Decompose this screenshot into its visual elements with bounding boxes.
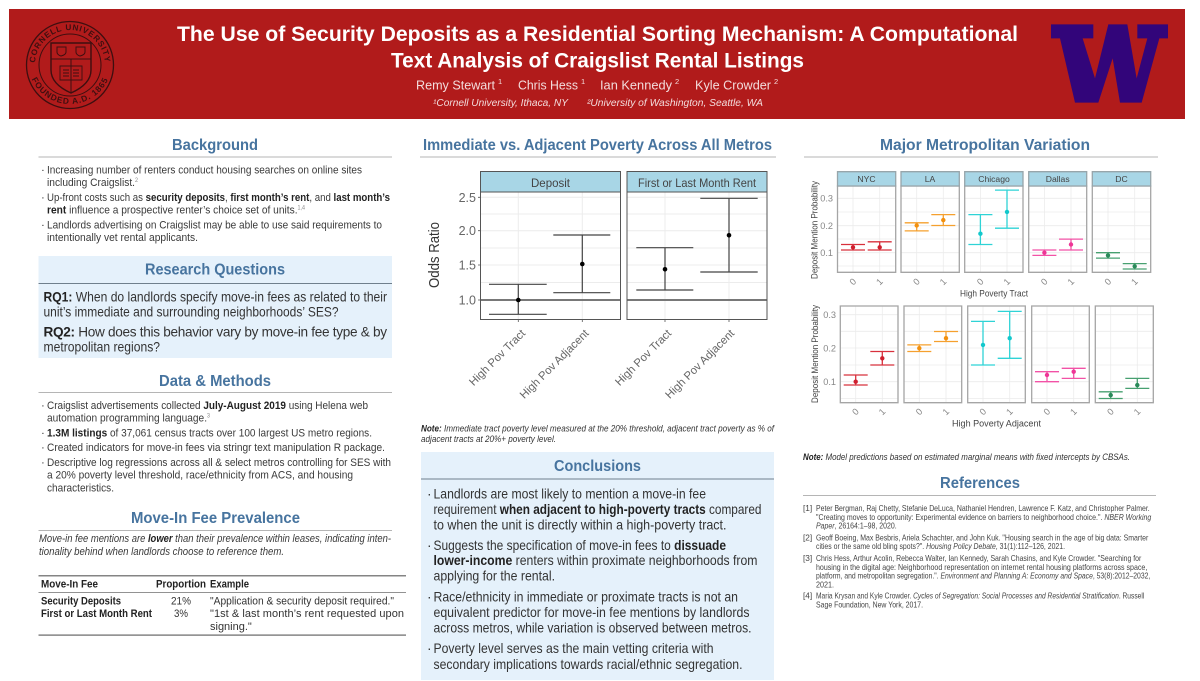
heading: background: Background <box>172 137 258 154</box>
table: move-in fee examples: Proportion <box>156 578 206 590</box>
metro panel frames and strips: Chicago <box>978 174 1010 184</box>
y axis title: Odds Ratio <box>427 222 443 288</box>
text block: data and methods bullets: automation programming language. <box>47 412 227 424</box>
heading: major metropolitan variation: Major Metropolitan Variation <box>880 137 1090 154</box>
axes labels: 1 <box>1004 407 1015 417</box>
series: NYC <box>841 242 892 250</box>
authors: Chris Hess <box>518 78 578 92</box>
header banner <box>9 9 1185 119</box>
text block: data and methods bullets: a 20% poverty level threshold, race/ethnicity from ACS, and housing <box>47 470 353 482</box>
table: move-in fee examples <box>38 575 406 636</box>
axes labels: High Poverty Adjacent <box>952 418 1042 428</box>
text block: conclusions bullets: Poverty level serves as the main vetting criteria with <box>434 640 714 656</box>
icon: University of Washington W logo <box>1051 24 1168 103</box>
axes labels <box>810 304 1143 428</box>
text block: prevalence note <box>39 533 391 558</box>
text block: research questions: unit’s immediate and surrounding neighborhoods’ SES? <box>44 304 339 320</box>
text block: reference list: 2021. <box>816 579 834 589</box>
authors: 1 <box>581 77 585 86</box>
series: NYC <box>844 352 894 385</box>
text block: conclusions bullets: · <box>427 640 432 656</box>
axes labels: 0.2 <box>823 344 836 354</box>
icon: Cornell University seal: CORNELL UNIVERSITY <box>30 24 110 62</box>
table: move-in fee examples: "Application & security deposit required." <box>210 596 394 608</box>
chart grid <box>838 186 1150 272</box>
text block: background bullets: 1,4 <box>298 206 306 212</box>
text block: conclusions bullets: equivalent predictor for move-in fee mentions by landlords <box>434 604 750 620</box>
text block: background bullets: Up-front costs such as security deposits, first month’s rent, and last month’s <box>47 192 390 204</box>
panel: first or last month rent strip and frame: First or Last Month Rent <box>638 176 757 190</box>
text block: conclusions bullets: lower-income renters within proximate neighborhoods from <box>434 552 758 568</box>
axes labels: 1 <box>941 407 951 417</box>
axes labels <box>810 180 1140 298</box>
icon: Cornell University seal <box>26 20 114 110</box>
text block: conclusions bullets: to when the unit is directly within a high-poverty tract. <box>434 516 726 532</box>
series: Dallas <box>1035 368 1086 382</box>
title <box>177 23 1018 72</box>
x axis labels <box>467 327 738 401</box>
axes labels: 0 <box>914 407 925 417</box>
text block: background bullets <box>41 164 390 244</box>
series: DC <box>1096 253 1147 269</box>
heading: conclusions: Conclusions <box>554 458 641 475</box>
table: move-in fee examples: Security Deposits <box>41 596 121 608</box>
text block: reference list: [3] <box>803 553 812 563</box>
y axis ticks and labels: 1.0 <box>459 294 476 308</box>
x axis labels: High Pov Tract <box>467 327 529 389</box>
authors: 2 <box>675 77 679 86</box>
authors <box>416 77 778 92</box>
table: move-in fee examples: First or Last Month Rent <box>41 608 152 620</box>
text block: reference list: cities or the same old bling spots?". Housing Policy Debate, 31(1):112–126, 2021. <box>816 541 1065 551</box>
table: move-in fee examples: 21% <box>171 596 191 608</box>
panel: major metropolitan variation <box>803 137 1158 462</box>
authors: Ian Kennedy <box>600 78 672 92</box>
axes labels: 0 <box>978 407 988 417</box>
text block: chart note: Note: Immediate tract poverty level measured at the 20% threshold, adjacent tract poverty as % of <box>421 422 775 434</box>
text block: conclusions bullets: secondary implications towards racial/ethnic segregation. <box>434 656 742 672</box>
affiliations <box>433 98 763 109</box>
axes labels: Deposit Mention Probability <box>810 304 820 403</box>
text block: background bullets: · <box>41 164 45 176</box>
text block: reference list: Sage Foundation, New York, 2017. <box>816 599 923 609</box>
axes labels: 0.1 <box>823 377 836 387</box>
axes labels: 0.3 <box>820 194 833 204</box>
series: LA <box>907 332 958 352</box>
reference line at 1.0 <box>480 299 767 301</box>
heading: research questions: Research Questions <box>145 262 285 278</box>
text block: conclusions bullets: Race/ethnicity in immediate or proximate tracts is not an <box>434 588 738 604</box>
text block: data and methods bullets: · <box>41 442 45 454</box>
text block: data and methods bullets: · <box>41 457 45 469</box>
chart: odds ratio by poverty measure <box>427 172 767 401</box>
axes labels: High Poverty Tract <box>960 288 1029 298</box>
x axis labels: High Pov Tract <box>613 327 675 389</box>
axes labels: 1 <box>1068 407 1079 417</box>
heading: data and methods: Data & Methods <box>159 373 271 390</box>
series: DC <box>1099 378 1149 398</box>
text block: data and methods bullets: 1.3M listings of 37,061 census tracts over 100 largest US metro regions. <box>47 428 372 440</box>
text block: reference list: [2] <box>803 532 812 542</box>
error bars and point estimates <box>489 198 758 314</box>
axes labels: 0 <box>848 277 858 287</box>
text block: background bullets: · <box>41 220 45 232</box>
panel: deposit strip and frame: Deposit <box>531 176 571 190</box>
axes labels: 0 <box>1105 407 1116 417</box>
heading: immediate vs adjacent poverty: Immediate vs. Adjacent Poverty Across All Metros <box>423 137 772 154</box>
y axis ticks and labels: 2.0 <box>459 224 476 238</box>
text block: chart note: adjacent tracts at 20%+ poverty level. <box>421 433 556 444</box>
table: move-in fee examples: Example <box>210 578 249 590</box>
text block: background bullets: · <box>41 192 45 204</box>
text block: conclusions bullets: · <box>427 588 432 604</box>
text block: data and methods bullets: · <box>41 400 45 412</box>
authors: Kyle Crowder <box>695 78 772 92</box>
axes labels: 1 <box>877 407 888 417</box>
authors: Remy Stewart <box>416 78 495 92</box>
text block: conclusions bullets: across metros, while variation is observed between metros. <box>434 620 752 636</box>
text block: reference list: Maria Krysan and Kyle Crowder. Cycles of Segregation: Social Processes and Residential Stratification. Russell <box>816 590 1144 600</box>
table: move-in fee examples: "1st & last month’s rent requested upon <box>210 608 404 620</box>
metro panel frames and strips: NYC <box>857 174 876 184</box>
text block: reference list: [1] <box>803 503 812 513</box>
y axis ticks and labels: 1.5 <box>459 258 476 272</box>
axes labels: 0 <box>1039 277 1050 287</box>
text block: research questions <box>44 290 387 354</box>
authors: 1 <box>498 77 502 86</box>
text block: background bullets: Landlords advertising on Craigslist may be able to use said requirements to <box>47 220 382 232</box>
axes labels: 0 <box>1042 407 1052 417</box>
x axis labels: High Pov Adjacent <box>518 327 592 401</box>
text block: metro chart note: Note: Model predictions based on estimated marginal means with fixed intercepts by CBSAs. <box>803 451 1130 462</box>
axes labels: 1 <box>1066 277 1076 287</box>
text block: reference list: Chris Hess, Arthur Acolin, Rebecca Walter, Ian Kennedy, Sarah Chasins, and Kyle Crowder. "Searching for <box>816 553 1141 563</box>
text block: reference list: "Creating moves to opportunity: Experimental evidence on barriers to neighborhood choice.". NBER Working <box>816 512 1152 522</box>
table: move-in fee examples: signing." <box>210 621 252 633</box>
chart: high poverty tract by metro <box>810 172 1151 298</box>
y axis ticks and labels: 2.5 <box>459 191 476 205</box>
text block: conclusions bullets <box>427 486 762 672</box>
axes labels: 0 <box>911 277 922 287</box>
text block: conclusions bullets: · <box>427 486 432 502</box>
axes labels: 0 <box>850 407 861 417</box>
text block: data and methods bullets: · <box>41 428 45 440</box>
title: Text Analysis of Craigslist Rental Listings <box>391 50 804 72</box>
affiliations: ²University of Washington, Seattle, WA <box>587 98 763 109</box>
text block: background bullets: 2 <box>135 178 139 184</box>
axes labels: 1 <box>1002 277 1012 287</box>
chart grid <box>841 306 1153 402</box>
text block: background bullets: including Craigslist. <box>47 177 145 189</box>
text block: research questions: RQ2: How does this behavior vary by move-in fee type & by <box>44 324 387 340</box>
authors: 2 <box>774 77 778 86</box>
axes labels: 1 <box>1129 277 1140 287</box>
axes labels: 0.2 <box>820 221 833 231</box>
text block: conclusions bullets: applying for the rental. <box>434 568 555 584</box>
axes labels: 0.3 <box>823 310 836 320</box>
affiliations: ¹Cornell University, Ithaca, NY <box>433 98 569 109</box>
text block: reference list: housing in the digital age: Neighborhood representation on internet rental housing platforms across space, <box>816 562 1147 572</box>
metro panel frames and strips: LA <box>925 174 936 184</box>
panel: conclusions <box>421 452 774 680</box>
text block: background bullets: intentionally vet rental applicants. <box>47 232 198 244</box>
text block: data and methods bullets: Descriptive log regressions across all & select metros controlling for SES with <box>47 457 391 469</box>
series: Chicago <box>968 190 1019 244</box>
axes labels: 1 <box>1132 407 1143 417</box>
axes labels: Deposit Mention Probability <box>810 180 820 279</box>
panel: immediate vs adjacent poverty <box>420 137 776 444</box>
text block: reference list: Paper, 26164:1–98, 2020. <box>816 520 897 530</box>
text block: conclusions bullets: Landlords are most likely to mention a move-in fee <box>434 486 706 502</box>
text block: research questions: metropolitan regions? <box>44 340 160 354</box>
metro panel frames and strips: DC <box>1115 174 1128 184</box>
panel: deposit strip and frame <box>480 172 620 320</box>
text block: background bullets: rent influence a prospective renter’s choice set of units. <box>47 204 325 216</box>
axes labels: 1 <box>938 277 949 287</box>
y axis ticks and labels <box>459 191 729 322</box>
text block: conclusions bullets: requirement when adjacent to high-poverty tracts compared <box>434 501 762 517</box>
icon: Cornell University seal: FOUNDED A.D. 1865 <box>32 76 108 104</box>
text block: data and methods bullets <box>41 400 391 494</box>
text block: conclusions bullets: Suggests the specification of move-in fees to dissuade <box>434 537 726 553</box>
panel: references <box>803 475 1156 609</box>
metro panel frames and strips <box>838 172 1151 272</box>
axes labels: 0 <box>975 277 986 287</box>
series: LA <box>905 215 955 231</box>
text block: reference list <box>803 503 1152 609</box>
panel: move-in fee prevalence <box>38 510 406 636</box>
panel: data and methods <box>38 373 392 494</box>
heading: references: References <box>940 475 1020 492</box>
text block: prevalence note: tionality behind when landlords choose to reference them. <box>39 546 284 558</box>
axes labels: 0.1 <box>820 248 833 258</box>
text block: conclusions bullets: · <box>427 537 432 553</box>
table: move-in fee examples: 3% <box>174 608 188 620</box>
axes labels: 0 <box>1103 277 1113 287</box>
metro panel frames <box>840 306 1153 403</box>
metro panel frames and strips: Dallas <box>1046 174 1070 184</box>
panel: first or last month rent strip and frame <box>627 172 767 320</box>
text block: chart note <box>421 422 775 444</box>
text block: research questions: RQ1: When do landlords specify move-in fees as related to their <box>44 290 387 304</box>
chart grid <box>481 192 767 319</box>
text block: data and methods bullets: Craigslist advertisements collected July-August 2019 using Helena web <box>47 400 368 412</box>
text block: data and methods bullets: characteristics. <box>47 482 114 494</box>
series: Dallas <box>1032 239 1083 255</box>
x axis labels: High Pov Adjacent <box>663 327 738 401</box>
panel: background <box>38 137 392 244</box>
table: move-in fee examples: Move-In Fee <box>41 578 98 590</box>
text block: background bullets: Increasing number of renters conduct housing searches on online sites <box>47 164 362 176</box>
text block: prevalence note: Move-in fee mentions are lower than their prevalence within leases, indicating inten- <box>39 533 391 545</box>
title: The Use of Security Deposits as a Residential Sorting Mechanism: A Computational <box>177 23 1018 46</box>
text block: reference list: [4] <box>803 590 812 600</box>
heading: move-in fee prevalence: Move-In Fee Prevalence <box>131 510 300 527</box>
axes labels: 1 <box>874 277 885 287</box>
chart: high poverty adjacent by metro <box>810 304 1153 428</box>
series: Chicago <box>971 311 1022 365</box>
text block: reference list: platform, and metropolitan segregation.". Environment and Planning A: Economy and Space, 53(8):2012–2032, <box>816 570 1150 580</box>
panel: research questions <box>38 256 392 358</box>
text block: data and methods bullets: Created indicators for move-in fees via stringr text manipulation R package. <box>47 442 385 454</box>
text block: data and methods bullets: 3 <box>207 414 211 420</box>
